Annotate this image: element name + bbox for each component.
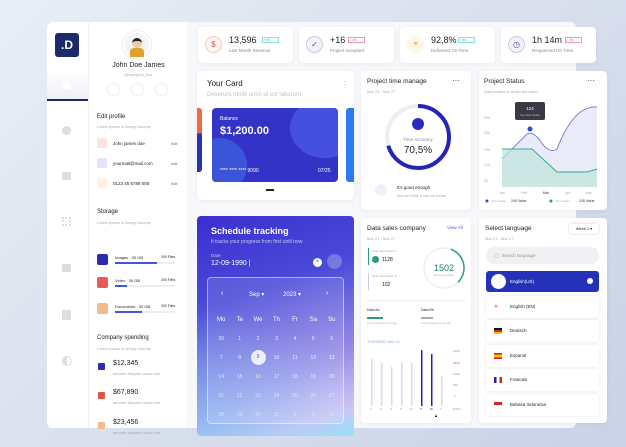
calendar: 15 [237,374,242,380]
credit card: 07/25 [318,168,331,174]
calendar: 13 [329,354,335,360]
sidebar profile: Lorem ipsum is simply dummy [97,220,151,225]
calendar: 28 [218,412,224,418]
calendar: 1 [238,336,241,342]
panel: select language: Bahasa Indonesia [510,402,546,407]
panel: schedule tracking: × [316,259,319,265]
calendar: 18 [292,374,298,380]
calendar: Te [236,316,243,322]
sidebar profile: $67,890 [113,389,138,396]
main panel [47,22,576,428]
sidebar profile: 200 Files [161,278,175,282]
panel: data sales company [361,218,471,423]
panel: schedule tracking [197,216,354,436]
calendar: 17 [274,374,279,380]
bar chart: 3000 [453,349,460,353]
panel: select language: Espanol [510,353,526,358]
panel: schedule tracking: 12-09-1990 | [211,260,251,267]
donut [385,104,451,170]
calendar: Sep ▾ [249,292,264,298]
storage: Storage [97,209,118,215]
text: +16 [330,35,345,45]
sidebar profile: edit [171,161,177,166]
sidebar profile: Lorem ipsum is simply dummy [97,124,151,129]
line chart: 124 [526,106,534,111]
sidebar profile: 0123 45 6789 000 [113,181,149,186]
calendar: 2 [312,412,315,418]
line chart: 200 [484,131,490,135]
company spending: Company spending [97,335,149,341]
calendar: ‹ [221,290,223,297]
panel: data sales company: Data information B [372,274,397,278]
sidebar profile: 200 Files [161,255,175,259]
calendar: 1 [294,412,296,418]
text: ↙ 2% [566,38,574,42]
line chart: May [585,191,592,195]
calendar: 19 [311,374,316,380]
panel: data sales company: THURSDAY, MAY 14 [367,340,400,344]
text: Delivered On Time [431,48,468,53]
calendar: 2023 ▾ [283,292,301,298]
calendar: 23 [255,392,261,398]
search [486,247,599,264]
panel: select language [479,218,607,423]
line chart: Mar [543,191,550,195]
panel: project status [479,71,607,210]
sidebar profile: $23,456 [113,419,138,426]
line chart [484,102,598,203]
panel: select language: Deutsch [510,328,527,333]
sidebar profile: @userjohn_doe [124,72,153,77]
calendar: 10 [274,354,279,360]
line chart: Jan [499,191,505,195]
sidebar profile: John Doe James [112,62,165,69]
panel: data sales company: Data sales company [367,225,426,232]
bar chart: W [430,407,433,411]
calendar: 31 [274,412,279,418]
panel: project status: Project Status [484,78,524,85]
bar chart: 500 [453,383,458,387]
panel: schedule tracking: It tracks your progress from first until now [211,239,302,245]
edit profile: Edit profile [97,114,125,120]
panel: select language: Week 1 ▾ [576,226,592,231]
bar chart: S [400,407,402,411]
line chart: 100 [484,163,490,167]
calendar: 9 [257,354,259,360]
text: aenean aliquam class cras [113,430,160,435]
calendar: 6 [330,336,333,342]
text: ⚭ [413,41,418,48]
panel: project time manage: ··· [452,76,460,85]
bar chart: 0 [454,394,456,398]
search: ◯ Search language [494,253,536,258]
calendar: 26 [311,392,316,398]
sidebar profile: edit [171,181,177,186]
panel: data sales company: 102 [382,282,390,288]
nav strip [47,22,88,428]
bar chart: F [380,407,382,411]
text: ✓ [311,40,318,49]
calendar: 7 [220,354,223,360]
avatar [123,31,151,59]
calendar: 3 [330,412,333,418]
calendar: 25 [292,392,298,398]
calendar: We [254,316,262,322]
calendar: 2 [257,336,259,342]
text: 1h 14m [532,35,562,45]
panel: your card [197,71,354,200]
panel: your card: ⋮ [341,80,349,89]
bar chart: M [410,407,413,411]
sidebar profile: Documents · 30 GB [115,304,150,309]
line chart: New Data Update [520,114,540,117]
text: ↙ 2% [349,38,357,42]
panel: project time manage: Mar 21 - Mar 27 [367,89,395,94]
panel: project status: Data collect to which the users [484,89,538,94]
bar chart [370,349,461,418]
calendar: 8 [238,354,241,360]
calendar: 3 [275,336,278,342]
panel: data sales company: Lorem ipsum is simply [367,321,397,325]
stat cards: Last Month Revenue [229,48,271,53]
line chart: 245 Value [579,199,595,203]
calendar: 5 [312,336,315,342]
sidebar profile [88,22,187,428]
calendar: 21 [218,392,224,398]
bar chart: T [440,407,442,411]
panel: data sales company: Data Aa [367,308,379,312]
calendar: › [326,290,328,297]
calendar: 22 [237,392,242,398]
calendar: 30 [255,412,261,418]
donut: Time Accuracy [403,137,433,142]
logo [55,33,79,57]
panel: data sales company: Data Bb [421,308,434,312]
stat cards: ↗ 8% [263,38,271,42]
bar chart: 2500 [453,361,460,365]
calendar: 11 [292,354,298,360]
sidebar profile: edit [171,141,177,146]
panel: data sales company: Mar 21 - Mar 27 [367,236,395,241]
credit card: Balance [220,116,238,122]
text: ↗ 8% [459,38,467,42]
sidebar profile: 200 Files [161,304,175,308]
panel: data sales company: 1502 [434,263,454,273]
text: ◷ [513,40,520,49]
text: Project Accepted [330,48,364,53]
line chart: 250 [484,116,490,120]
panel: data sales company: 1128 [382,257,393,263]
calendar: Mo [217,316,225,322]
bar chart: T [420,407,422,411]
credit card: $1,200.00 [220,125,269,137]
panel: data sales company: Lorem ipsum is simply [421,321,451,325]
bar chart: 1000 [453,372,460,376]
logo: .D [61,38,73,52]
panel: your card: Your Card [207,79,243,88]
sidebar profile: yourmail@mail.com [113,161,153,166]
calendar: 27 [329,392,335,398]
calendar: 30 [218,336,224,342]
language list [486,271,599,292]
line chart: 150 [484,148,490,152]
sidebar profile: Video · 30 GB [115,278,140,283]
panel: data sales company: View All [447,225,463,230]
line chart: Feb [521,191,527,195]
sidebar profile: John james doe [113,141,145,146]
panel: project time manage: But we think it can be better [397,193,446,198]
line chart: Apr [565,191,571,195]
line chart: 245 Value [511,199,527,203]
panel: project time manage: Project time manage [367,78,427,85]
calendar: 16 [255,374,261,380]
line chart: Information [491,199,506,203]
bar chart: S [390,407,392,411]
sidebar profile: aenean aliquam class cras [113,371,160,376]
stat cards [198,27,293,63]
calendar: Su [328,316,335,322]
panel: schedule tracking: Date [211,253,221,258]
sidebar profile: Lorem ipsum is simply dummy [97,346,151,351]
panel: project time manage: It's good enough [397,185,430,190]
credit card: **** **** **** 9090 [220,168,259,174]
panel: project time manage [361,71,471,210]
sidebar profile: Images · 30 GB [115,255,143,260]
text: Responsed On Time [532,48,573,53]
stat cards: 13,596 [229,35,257,45]
line chart: 50 [484,179,488,183]
calendar: Sa [310,316,317,322]
panel: schedule tracking: Schedule tracking [211,226,289,236]
text: 92,8% [431,35,457,45]
calendar: Th [273,316,280,322]
calendar: 12 [311,354,316,360]
panel: select language: Select language [485,225,532,232]
sidebar profile: $12,345 [113,360,138,367]
calendar [207,277,344,424]
bar chart: DATA [453,407,461,411]
panel: your card: Deserunt mollit anim id est laborum [207,92,301,98]
calendar: 14 [218,374,224,380]
panel: data sales company: Revenue Analytics [434,274,455,277]
donut: 70,5% [404,145,432,156]
calendar: 20 [329,374,335,380]
calendar: 24 [274,392,279,398]
stat cards: $ [211,40,216,49]
panel: data sales company: Data information A [372,249,397,253]
language list: English(US) [510,279,534,284]
panel: select language: Mar 21 - Mar 27 [485,236,513,241]
bar chart: ▲ [434,413,438,418]
sidebar profile: aenean aliquam class cras [113,400,160,405]
panel: project status: ··· [587,76,595,85]
credit card [212,108,338,182]
panel: select language: English (EN) [510,304,535,309]
calendar: 4 [294,336,296,342]
bar chart: T [370,407,372,411]
calendar: Fr [292,316,298,322]
calendar: 29 [237,412,242,418]
panel: select language: Francais [510,377,527,382]
line chart: Information [555,199,570,203]
panel: select language: ✕ [494,304,498,310]
